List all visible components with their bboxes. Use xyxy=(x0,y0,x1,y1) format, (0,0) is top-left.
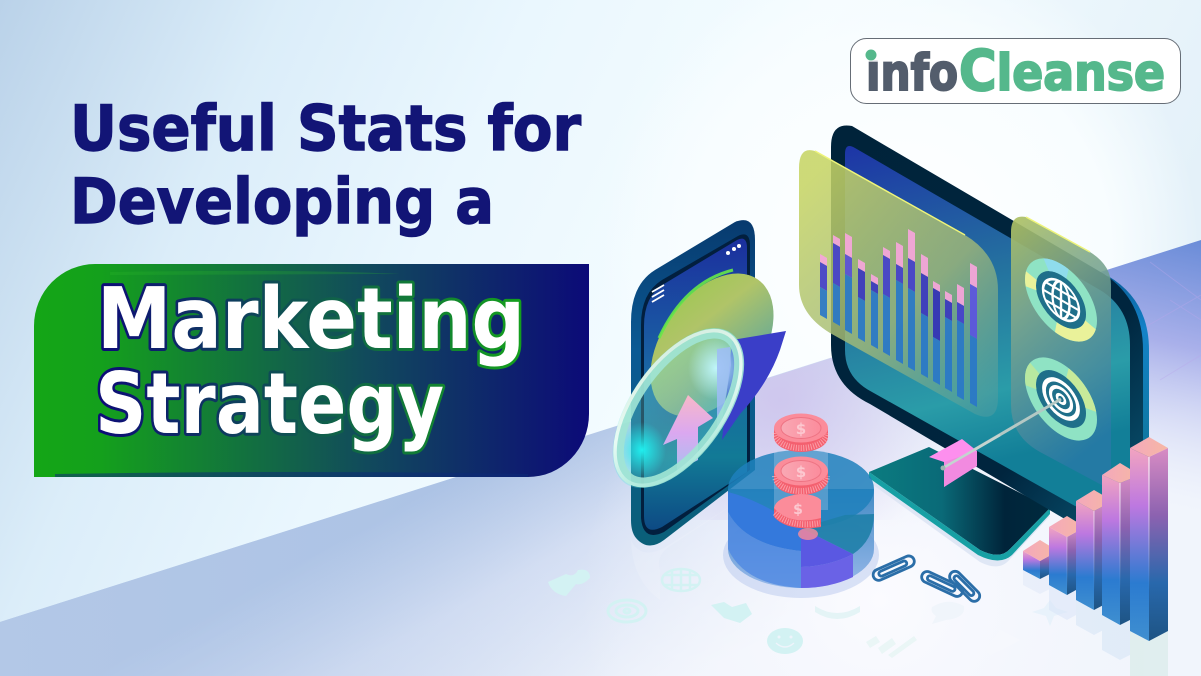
magnifying lens xyxy=(587,306,769,510)
bar chart xyxy=(820,229,977,407)
bar 3 xyxy=(1076,490,1113,610)
icon: dots xyxy=(726,244,741,255)
phone screen xyxy=(644,239,747,530)
green chart disc xyxy=(625,251,799,439)
banner: marketing strategy: Marketing xyxy=(97,270,525,369)
title: useful stats for developing a: Useful Stats for xyxy=(70,92,581,165)
icon: menu xyxy=(652,285,664,302)
glass panel: donuts xyxy=(1011,217,1111,490)
monitor screen xyxy=(845,146,1130,520)
icon: star xyxy=(1032,600,1068,626)
icon: trophy xyxy=(985,630,1020,655)
floor icons xyxy=(548,569,1068,658)
isometric bar chart xyxy=(1023,437,1168,676)
phone xyxy=(631,220,755,546)
logo: infoCleanse: Cleanse xyxy=(959,39,1165,104)
bar 4 xyxy=(1102,463,1140,625)
glass panel: bar chart xyxy=(799,150,998,417)
icon: chat xyxy=(932,602,964,624)
monitor xyxy=(831,125,1149,540)
banner: marketing strategy: Strategy xyxy=(95,355,444,454)
arrow into target xyxy=(929,399,1061,487)
icon: globe xyxy=(1043,272,1079,328)
floor plane xyxy=(0,240,1201,676)
pie blue slice xyxy=(728,492,801,551)
phone reflection xyxy=(631,500,740,600)
paperclips xyxy=(871,554,982,604)
coin 1: $ xyxy=(796,420,806,438)
icon: thumbs up xyxy=(711,602,752,623)
title: useful stats for developing a xyxy=(70,92,581,238)
pie purple slice xyxy=(801,528,853,567)
bar 5 xyxy=(1130,437,1168,641)
monitor stand xyxy=(869,447,1050,566)
coin stack xyxy=(774,414,828,540)
donut with target icon xyxy=(1030,351,1092,447)
icon: small bars xyxy=(866,636,917,658)
icon: telephone xyxy=(815,606,860,619)
dark blue wedge xyxy=(722,331,786,440)
logo: infoCleanse: info xyxy=(866,44,958,102)
blue vertical shard xyxy=(717,347,731,428)
coin 4 xyxy=(798,528,818,540)
icon: target xyxy=(608,600,646,622)
donut with globe icon xyxy=(1030,252,1092,348)
logo: infoCleanse xyxy=(850,38,1180,104)
bar 2 xyxy=(1049,516,1085,595)
icon: up arrow xyxy=(663,395,713,471)
bar 1 xyxy=(1023,540,1058,579)
icon: person xyxy=(548,570,590,596)
banner: marketing strategy xyxy=(34,264,589,477)
bar reflections xyxy=(1023,570,1168,676)
pie chart cylinder xyxy=(723,450,879,598)
bar highlights xyxy=(1067,457,1149,590)
icon: smile xyxy=(767,628,803,654)
coin 3: $ xyxy=(793,502,803,518)
icon: target xyxy=(1044,372,1078,426)
title: useful stats for developing a: Developing a xyxy=(70,165,494,238)
icon: globe xyxy=(662,569,700,591)
pie teal slice xyxy=(801,514,874,554)
coin 2: $ xyxy=(796,463,806,481)
